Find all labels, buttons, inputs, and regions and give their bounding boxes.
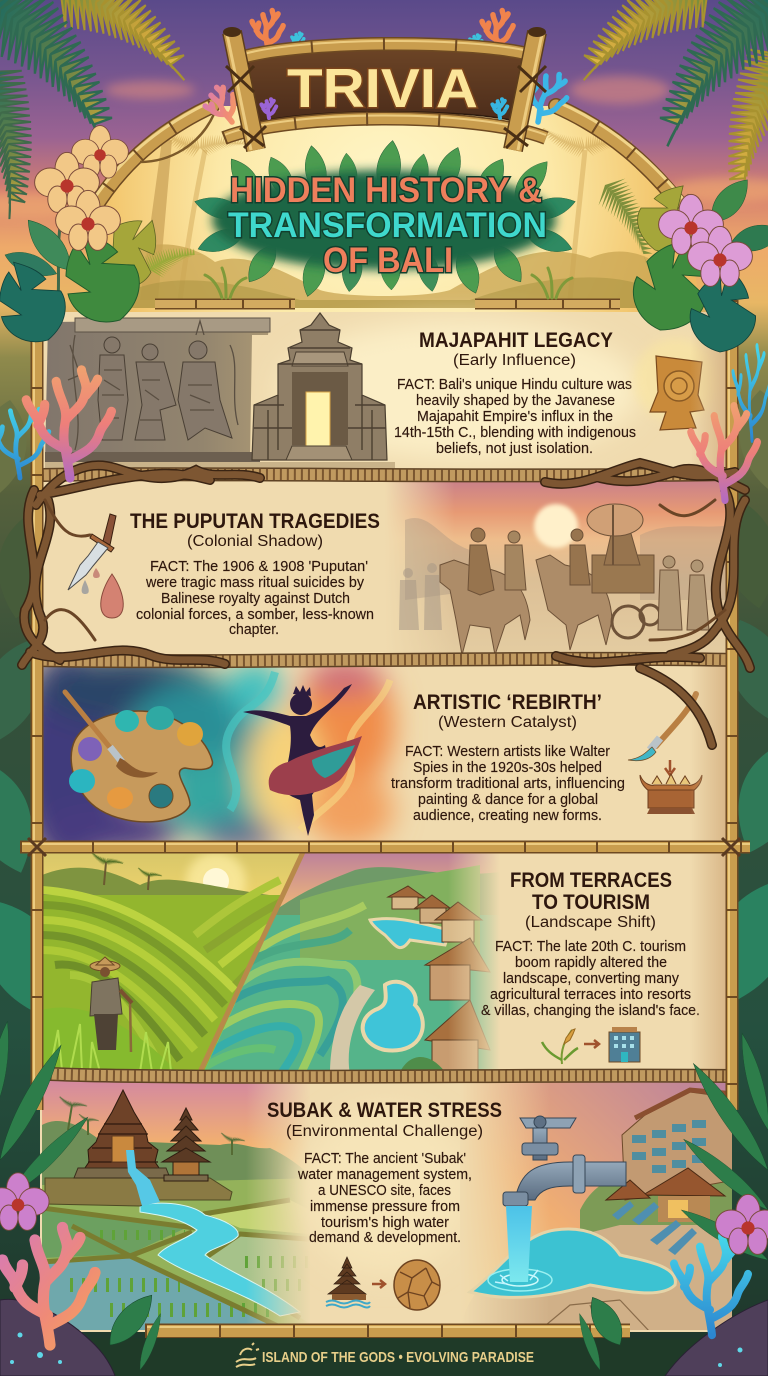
fact text: were tragic mass ritual suicides by [145, 575, 365, 591]
orchid flowers [659, 194, 752, 286]
small palms [68, 1105, 232, 1155]
bamboo bottom rail [224, 116, 546, 138]
small corals on board [261, 99, 507, 118]
fact text: FACT: Western artists like Walter [405, 744, 610, 760]
diagonal divider stick [200, 852, 303, 1072]
fact text: 14th-15th C., blending with indigenous [394, 425, 636, 441]
sign title: TRIVIA [287, 57, 478, 119]
parchment background [40, 850, 732, 1074]
paddy dykes [42, 1200, 320, 1328]
heading: SUBAK & WATER STRESS [267, 1099, 502, 1122]
fact text: FACT: The ancient 'Subak' [304, 1151, 466, 1167]
fact text: Spies in the 1920s-30s helped [413, 760, 602, 776]
bamboo shelf left [155, 298, 295, 310]
dancer silhouette [243, 684, 362, 836]
fact text: & villas, changing the island's face. [481, 1003, 700, 1019]
terrace platform [45, 1178, 232, 1206]
fact text: boom rapidly altered the [515, 955, 667, 971]
fact text: agricultural terraces into resorts [490, 987, 691, 1003]
fact text: Majapahit Empire's influx in the [417, 409, 613, 425]
lower orchids [0, 1173, 768, 1254]
resort scene with tap and pool [460, 1078, 735, 1332]
title: Hidden History and Transformation of Bali: OF BALI [323, 241, 453, 280]
fact text: landscape, converting many [503, 971, 680, 987]
bamboo shelf right [475, 298, 620, 310]
heading: ARTISTIC ‘REBIRTH’ [413, 691, 602, 714]
arch glow behind header [76, 106, 702, 320]
fact text: FACT: The 1906 & 1908 'Puputan' [150, 559, 368, 575]
palette and brush [65, 692, 213, 822]
tangled roots around Puputan panel [22, 463, 750, 745]
title: Hidden History and Transformation of Bali: HIDDEN HISTORY & [230, 171, 542, 210]
corals on sign [200, 11, 573, 130]
heading: THE PUPUTAN TRAGEDIES [130, 510, 380, 533]
bamboo top rail [240, 41, 528, 58]
rice terraces scene [42, 850, 312, 1075]
bottom bamboo rail [145, 1327, 630, 1331]
bamboo right post [504, 27, 546, 150]
fact text: beliefs, not just isolation. [436, 441, 593, 457]
bamboo left post [223, 27, 266, 150]
fact text [297, 1151, 472, 1246]
rope divider: under Puputan [40, 659, 735, 661]
fact text [481, 939, 700, 1019]
fact text [136, 559, 374, 638]
icon: temple to cracked earth [326, 1257, 440, 1310]
heading [510, 869, 672, 914]
grass tufts in header [205, 268, 572, 298]
fact text: painting & dance for a global [418, 792, 598, 808]
Trivia sign [200, 11, 573, 150]
icon: water tap [495, 1116, 626, 1284]
heading: TO TOURISM [532, 891, 650, 914]
palm tree in terraces [87, 850, 163, 890]
wooden board [248, 46, 522, 124]
sepia colonial procession scene [385, 480, 735, 660]
fact text: colonial forces, a somber, less-known [136, 607, 374, 623]
warm glow [280, 320, 640, 460]
title: Hidden History and Transformation of Bali [228, 171, 547, 280]
icon: golden artifact [634, 338, 718, 430]
bamboo frame: vertical left [34, 300, 37, 1110]
farmer [90, 957, 132, 1052]
panel: Subak and Water Stress [40, 1078, 735, 1332]
parchment background [40, 1078, 732, 1332]
heading: FROM TERRACES [510, 869, 672, 892]
fact text: chapter. [229, 622, 279, 638]
lower right coral [674, 1236, 748, 1335]
rope divider: under Majapahit [42, 474, 730, 475]
fact text: heavily shaped by the Javanese [416, 393, 615, 409]
icon: rice to hotel [542, 1027, 640, 1064]
heading foliage backdrop [192, 139, 578, 299]
right foliage cluster with orchids [586, 172, 768, 355]
bamboo frame: vertical right [729, 300, 732, 1110]
subheading: (Early Influence) [453, 352, 576, 369]
panel: The Puputan Tragedies [40, 480, 735, 660]
fact text: FACT: The late 20th C. tourism [495, 939, 686, 955]
subheading: (Western Catalyst) [438, 714, 577, 731]
bamboo crossbar between Artistic and Terraces [20, 838, 750, 856]
temple gate [252, 313, 387, 460]
left mid coral [0, 370, 111, 478]
fact text: water management system, [297, 1167, 472, 1183]
distant palms and haze inside the arch [80, 121, 700, 308]
panel: Artistic Rebirth [44, 666, 726, 840]
resort terraces scene [200, 850, 500, 1075]
pagoda [162, 1108, 210, 1181]
icon: kris dagger and blood drops [68, 514, 123, 618]
fact text: Balinese royalty against Dutch [161, 591, 350, 607]
icon: brush, arrow and offering bowl [628, 694, 702, 814]
panel: From Terraces to Tourism [40, 850, 732, 1075]
subheading: (Colonial Shadow) [187, 533, 323, 550]
left foliage cluster with orchids [0, 126, 202, 354]
footer text [236, 1343, 534, 1367]
subheading: (Environmental Challenge) [286, 1123, 483, 1140]
rope divider: under Terraces [50, 1074, 735, 1077]
fact text: demand & development. [309, 1230, 461, 1246]
panel: Majapahit Legacy [40, 312, 732, 474]
right mid coral [691, 346, 768, 500]
fact text: FACT: Bali's unique Hindu culture was [397, 377, 632, 393]
footer band [0, 1338, 768, 1376]
subheading: (Landscape Shift) [525, 914, 656, 931]
bamboo arch [90, 103, 688, 212]
rice shoots [70, 1235, 315, 1310]
fact text: immense pressure from [310, 1199, 460, 1215]
heading: MAJAPAHIT LEGACY [419, 329, 613, 352]
palm fronds: top corners [0, 0, 768, 219]
lower corner foliage and rocks [0, 1020, 768, 1376]
waterfall [126, 1150, 160, 1206]
distant trees [42, 1121, 304, 1185]
icon: wave and sun [236, 1343, 259, 1367]
river [140, 1203, 300, 1316]
fact text: tourism's high water [321, 1215, 449, 1231]
fact text [391, 744, 625, 824]
painted swirl background [44, 667, 414, 840]
parchment background [40, 312, 732, 474]
title: Hidden History and Transformation of Bali: TRANSFORMATION [228, 206, 547, 245]
Subak temple and paddies scene [42, 1078, 332, 1330]
parchment background [40, 664, 732, 846]
footer tagline: ISLAND OF THE GODS • EVOLVING PARADISE [262, 1349, 534, 1366]
sky clouds [0, 76, 768, 217]
fact text: audience, creating new forms. [413, 808, 602, 824]
parchment background [40, 480, 732, 660]
main temple [84, 1089, 160, 1168]
lower left coral [2, 1228, 95, 1345]
orchid flowers [35, 126, 128, 250]
side jungle foliage [0, 388, 768, 1038]
fact text: a UNESCO site, faces [318, 1183, 451, 1199]
fact text [394, 377, 636, 457]
fact text: transform traditional arts, influencing [391, 776, 625, 792]
stone relief carving [45, 318, 395, 468]
right edge parchment shading [690, 312, 730, 1074]
